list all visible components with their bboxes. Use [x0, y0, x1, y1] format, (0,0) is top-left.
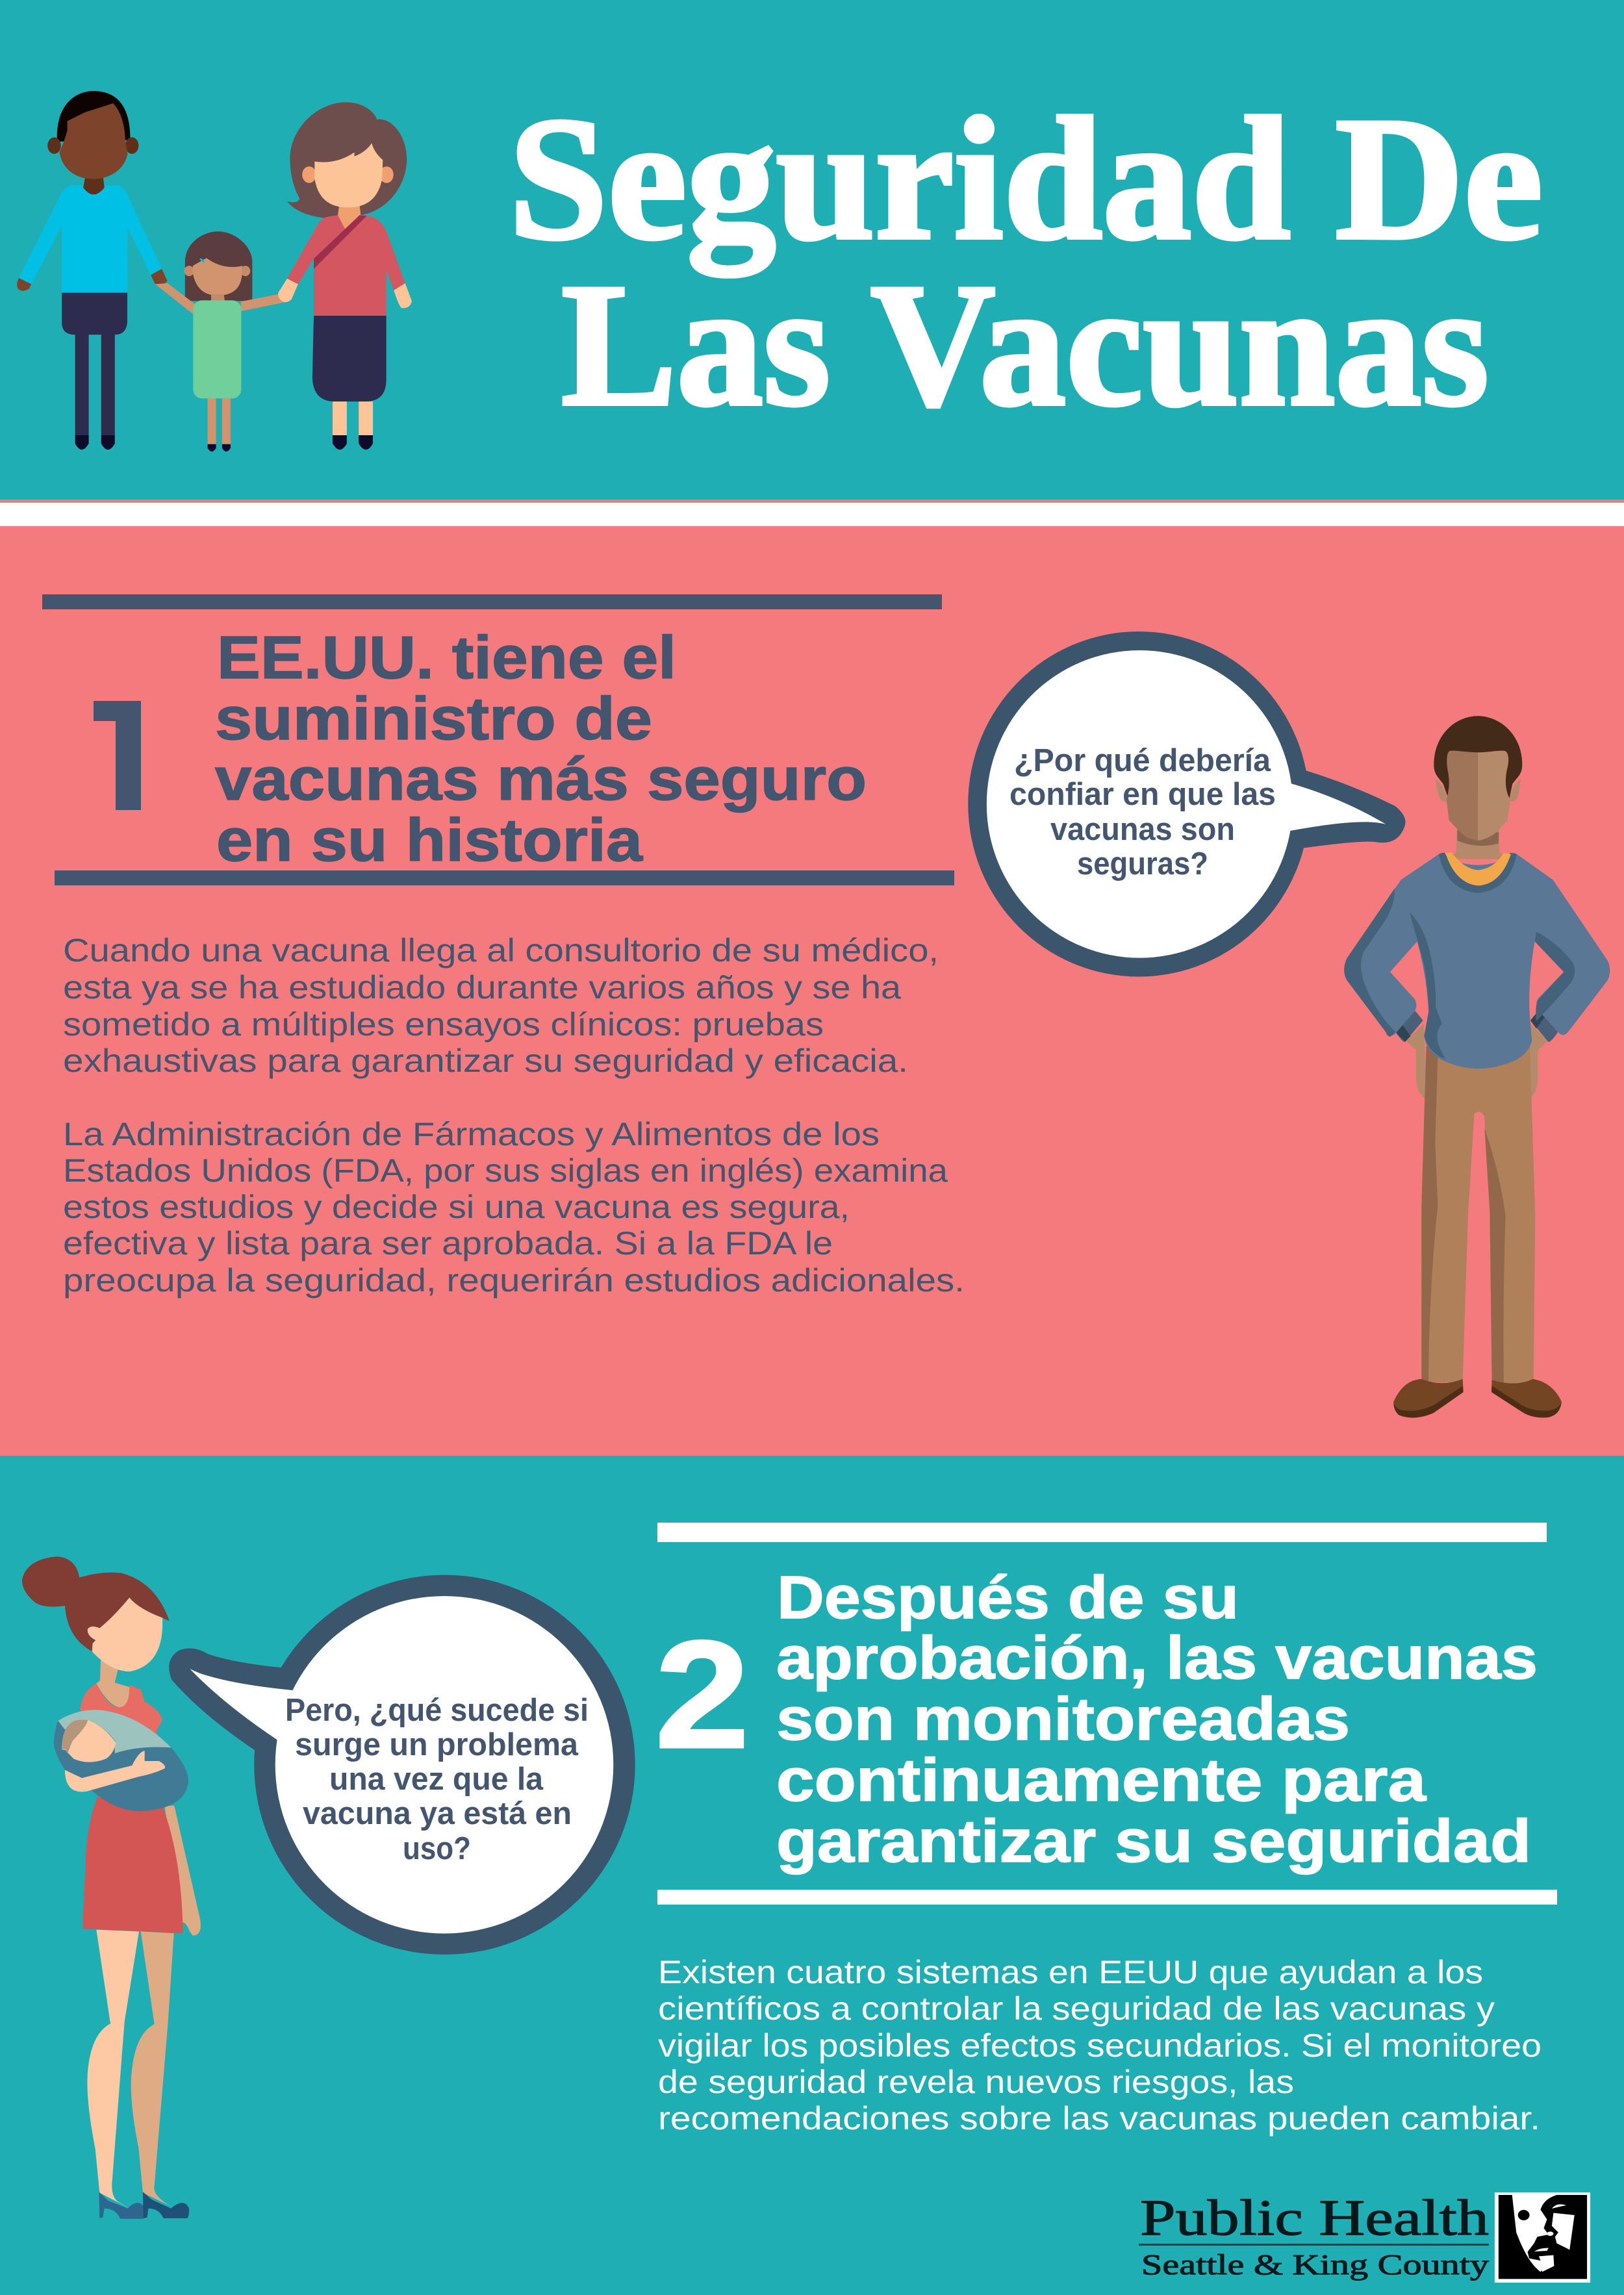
- icon: portrait emblem: [1495, 2192, 1590, 2283]
- heading: section 2: son monitoreadas: [776, 1685, 1350, 1753]
- illustration: family holding hands: [17, 91, 412, 451]
- heading rule top: [42, 594, 942, 609]
- figure: mother holding baby: [22, 1556, 201, 2219]
- heading: section 1: EE.UU. tiene el: [217, 624, 676, 691]
- heading: section 2: continuamente para: [776, 1746, 1427, 1814]
- text block: FDA review: efectiva y lista para ser aprobada. Si a la FDA le: [63, 1225, 833, 1262]
- heading rule top: [657, 1523, 1547, 1542]
- heading: section 2: garantizar su seguridad: [776, 1807, 1531, 1875]
- speech bubble: woman's question: Pero, ¿qué sucede si: [285, 1693, 589, 1728]
- speech bubble: man's question: ¿Por qué debería: [1014, 743, 1271, 778]
- panel: section 2: [0, 1456, 1624, 2295]
- panel: section 1: [0, 526, 1624, 1456]
- heading: section 2: [776, 1564, 1538, 1875]
- text block: clinical trials: sometido a múltiples ensayos clínicos: pruebas: [63, 1006, 824, 1043]
- heading: section 1: vacunas más seguro: [215, 745, 867, 813]
- speech bubble: man's question: vacunas son: [1050, 812, 1235, 847]
- title: [509, 81, 1543, 442]
- text block: FDA review: preocupa la seguridad, requerirán estudios adicionales.: [63, 1262, 965, 1299]
- heading: section 1: en su historia: [216, 806, 643, 874]
- panel: header: [0, 0, 1624, 500]
- text block: FDA review: Estados Unidos (FDA, por sus siglas en inglés) examina: [63, 1152, 948, 1189]
- numeral 1: 1: [77, 672, 162, 843]
- heading: section 1: [215, 624, 867, 874]
- heading: section 2: aprobación, las vacunas: [776, 1624, 1538, 1692]
- title: Las Vacunas: [561, 247, 1489, 442]
- text block: FDA review: [63, 1116, 965, 1299]
- text block: monitoring systems: científicos a controlar la seguridad de las vacunas y: [658, 1990, 1495, 2027]
- speech bubble: man's question: [968, 631, 1405, 977]
- title: Seguridad De: [509, 81, 1543, 279]
- speech bubble: woman's question: vacuna ya está en: [303, 1796, 572, 1831]
- figure: mother: [278, 103, 412, 450]
- logo: Public Health Seattle & King County: [1139, 2189, 1590, 2283]
- text block: monitoring systems: [658, 1954, 1542, 2137]
- speech bubble: woman's question: surge un problema: [295, 1727, 579, 1762]
- speech bubble: man's question: confiar en que las: [1009, 777, 1276, 812]
- text block: FDA review: estos estudios y decide si una vacuna es segura,: [63, 1189, 850, 1225]
- text block: clinical trials: exhaustivas para garantizar su seguridad y eficacia.: [63, 1043, 908, 1079]
- logo: Public Health Seattle & King County: Seattle & King County: [1141, 2249, 1489, 2281]
- heading rule bottom: [55, 870, 954, 885]
- heading: section 1: suministro de: [215, 685, 652, 752]
- text block: monitoring systems: de seguridad revela nuevos riesgos, las: [658, 2064, 1294, 2100]
- coral and white divider band: [0, 500, 1624, 526]
- figure: child: [155, 231, 284, 451]
- figure: father: [17, 91, 168, 450]
- speech bubble: woman's question: [169, 1575, 635, 1955]
- heading: section 2: Después de su: [777, 1564, 1239, 1631]
- text block: clinical trials: esta ya se ha estudiado durante varios años y se ha: [63, 969, 901, 1006]
- speech bubble: woman's question: una vez que la: [329, 1762, 544, 1797]
- text block: monitoring systems: recomendaciones sobre las vacunas pueden cambiar.: [658, 2100, 1540, 2137]
- text block: monitoring systems: Existen cuatro sistemas en EEUU que ayudan a los: [658, 1954, 1483, 1990]
- text block: monitoring systems: vigilar los posibles efectos secundarios. Si el monitoreo: [658, 2027, 1542, 2064]
- numeral 2: 2: [655, 1609, 750, 1781]
- figure: man with hands on hips: [1344, 716, 1610, 1417]
- text block: FDA review: La Administración de Fármacos y Alimentos de los: [63, 1116, 880, 1152]
- speech bubble: man's question: seguras?: [1077, 846, 1208, 881]
- heading rule bottom: [657, 1890, 1557, 1905]
- text block: clinical trials: Cuando una vacuna llega al consultorio de su médico,: [63, 932, 939, 969]
- logo: Public Health Seattle & King County: Public Health: [1140, 2189, 1489, 2246]
- speech bubble: woman's question: uso?: [403, 1831, 471, 1866]
- text block: clinical trials: [63, 932, 939, 1079]
